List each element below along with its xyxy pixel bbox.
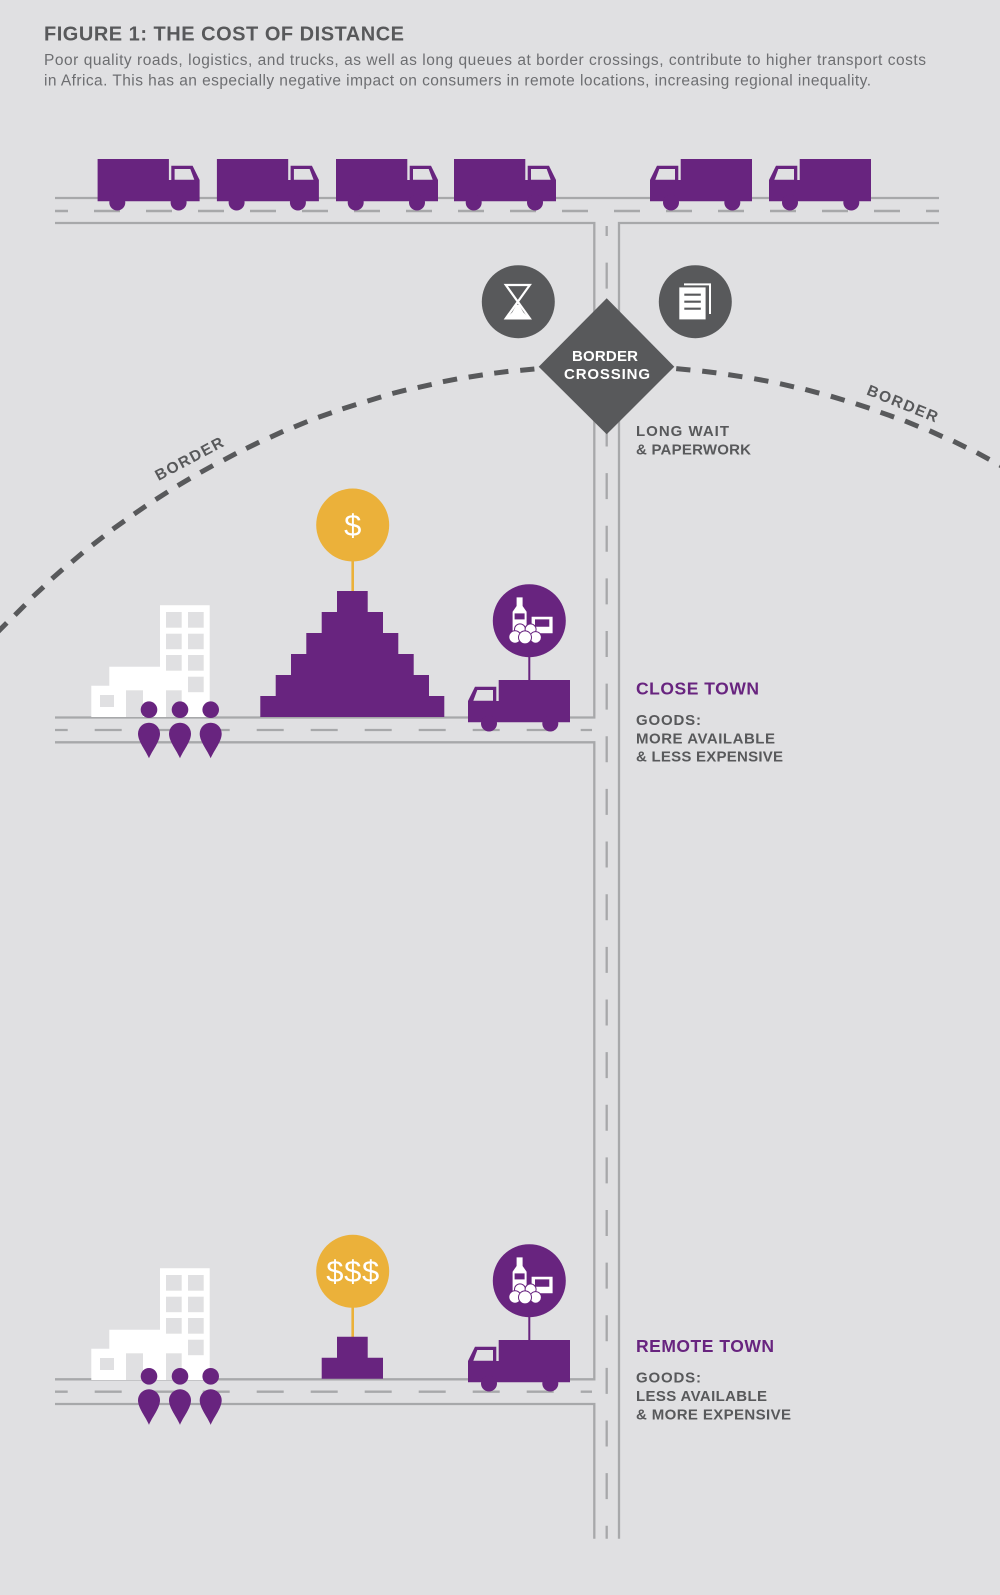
border crossing diamond: CROSSING — [564, 366, 650, 383]
label: close town: MORE AVAILABLE — [636, 730, 775, 747]
goods pyramid: remote town — [322, 1337, 383, 1379]
goods pyramid: close town — [260, 591, 444, 717]
description text — [44, 52, 926, 90]
border dashed line — [0, 369, 1000, 633]
border label right: BORDER — [864, 382, 940, 426]
label: close town: CLOSE TOWN — [636, 679, 759, 699]
building: close town — [91, 605, 210, 717]
border crossing diamond: BORDER — [572, 348, 638, 365]
people: remote town — [138, 1368, 222, 1425]
truck 4 — [454, 159, 556, 210]
icon: documents — [659, 265, 732, 338]
building: remote town — [91, 1268, 210, 1380]
people: close town — [138, 701, 222, 758]
border crossing diamond — [539, 298, 674, 434]
label: remote town: REMOTE TOWN — [636, 1336, 774, 1356]
price circle: remote town: $$$ — [326, 1254, 379, 1289]
title: FIGURE 1: THE COST OF DISTANCE — [44, 24, 404, 46]
price circle: close town — [316, 488, 389, 592]
label: long wait and paperwork — [636, 423, 751, 458]
label: long wait and paperwork: & PAPERWORK — [636, 441, 751, 458]
label: remote town — [636, 1336, 791, 1423]
description text: Poor quality roads, logistics, and trucks, as well as long queues at border crossings, contribute to higher transport costs — [44, 52, 926, 69]
trucks queue on border road — [98, 159, 871, 210]
truck 5 — [650, 159, 752, 210]
truck: close town — [468, 680, 570, 732]
truck 2 — [217, 159, 319, 210]
description text: in Africa. This has an especially negative impact on consumers in remote locations, increasing regional inequality. — [44, 72, 871, 90]
label: close town: & LESS EXPENSIVE — [636, 749, 783, 766]
close town — [91, 488, 570, 758]
truck 6 — [769, 159, 871, 210]
label: remote town: LESS AVAILABLE — [636, 1388, 767, 1405]
price circle: close town: $ — [344, 508, 361, 543]
label: long wait and paperwork: LONG WAIT — [636, 423, 729, 440]
label: remote town: GOODS: — [636, 1370, 701, 1387]
truck 3 — [336, 159, 438, 210]
icon: hourglass — [482, 265, 555, 338]
border label left: BORDER — [152, 434, 227, 485]
truck 1 — [98, 159, 200, 210]
road network — [55, 198, 939, 1539]
price circle: remote town — [316, 1235, 389, 1338]
goods icon: remote town — [493, 1244, 566, 1341]
goods icon: close town — [493, 584, 566, 681]
label: close town — [636, 679, 783, 766]
remote town — [91, 1235, 570, 1425]
label: close town: GOODS: — [636, 712, 701, 729]
truck: remote town — [468, 1340, 570, 1392]
label: remote town: & MORE EXPENSIVE — [636, 1406, 791, 1423]
